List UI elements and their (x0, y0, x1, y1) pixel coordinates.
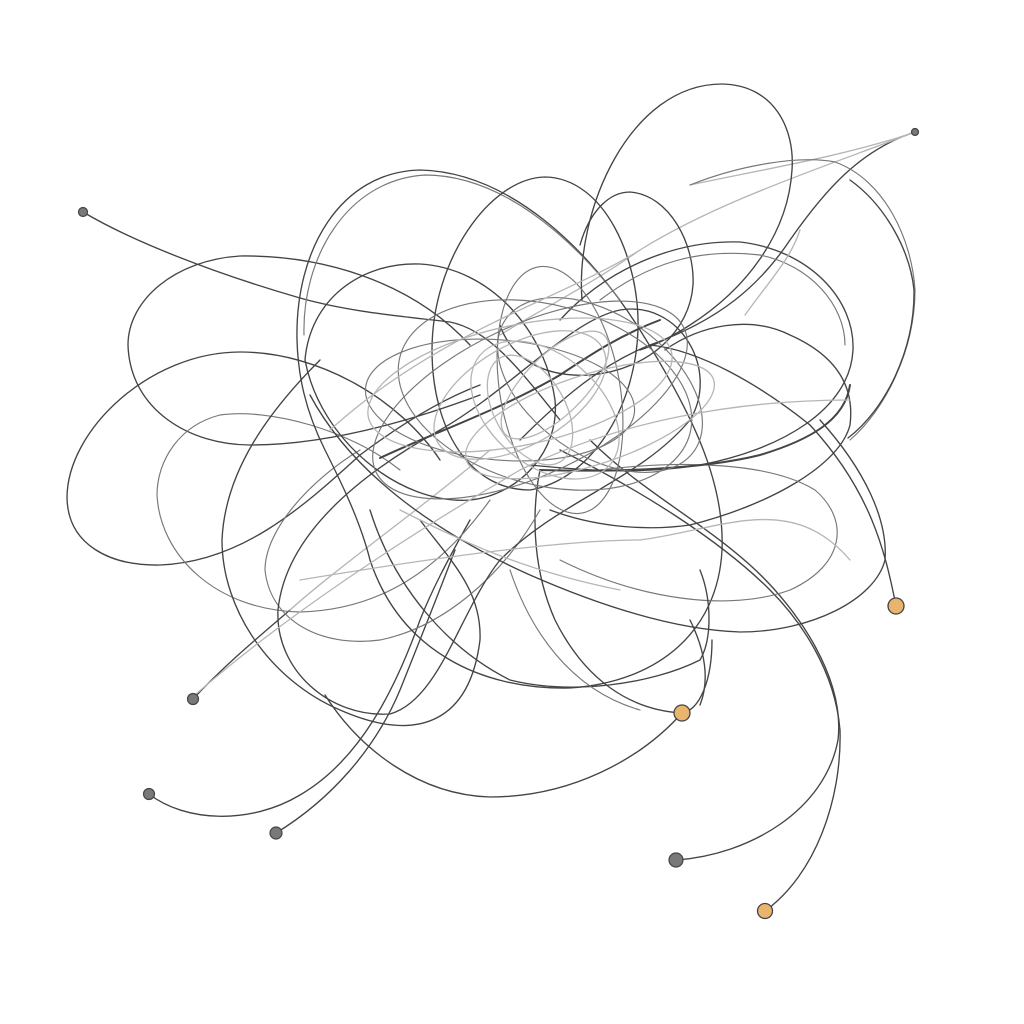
end node: upper right (912, 128, 918, 136)
oval right low (560, 465, 837, 601)
end node: bottom grey (669, 853, 683, 867)
right upper oval (530, 242, 853, 471)
tilted band low left (278, 309, 700, 714)
end node: lower left second (270, 827, 282, 839)
big lower right sweep (310, 395, 885, 632)
outer top right ring (690, 160, 915, 440)
dense centre knot (195, 230, 850, 695)
end node: centre orange (674, 705, 690, 721)
end node: bottom orange (758, 904, 772, 918)
central upper oval (432, 177, 638, 490)
end node: left (188, 694, 198, 704)
right lower oval (550, 324, 851, 528)
loop: wide left ring (222, 360, 480, 725)
loop: top right (581, 84, 792, 350)
end node: lower left (144, 788, 154, 800)
oval top middle (500, 192, 693, 375)
loop: lower left wide (157, 414, 490, 612)
end node: right orange (888, 598, 904, 614)
loop: left ring secondary (265, 450, 540, 641)
long bright streak (380, 320, 660, 458)
end node: upper left (78, 208, 88, 216)
ring lower center (370, 510, 709, 687)
large upper ring (297, 170, 722, 688)
tail strands leading to the end nodes (83, 132, 915, 911)
loop: upper left (128, 256, 480, 445)
ring upper left inner (305, 264, 555, 500)
loop: far left (67, 352, 480, 565)
large looping strands (67, 84, 915, 725)
